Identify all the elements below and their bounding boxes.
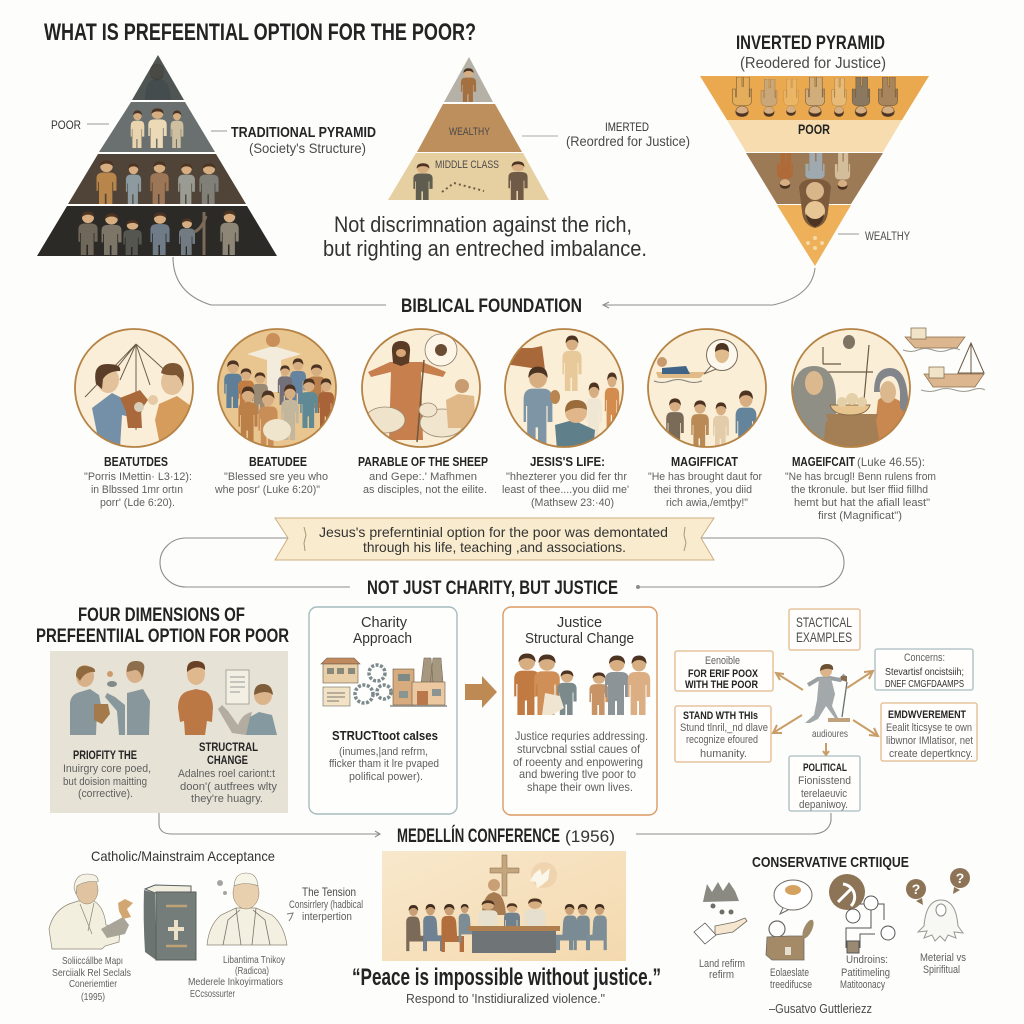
text: structural xyxy=(178,740,277,805)
text: jesus's life: "hhezterer you did fer thr xyxy=(506,471,627,483)
box: enable: Eenoible xyxy=(705,655,740,667)
box: stand with: recognize efoured xyxy=(686,734,758,746)
heading: medellin: MEDELLÍN CONFERENCE xyxy=(397,825,560,847)
label: traditional pyramid: (Society's Structure) xyxy=(249,140,366,156)
text: pope right caption xyxy=(188,954,286,1000)
text: parable: and Gepe:.' Mafhmen xyxy=(369,471,477,483)
box: concerns: Stevartisf oncistsiih; xyxy=(885,667,964,678)
label: inverted middle: IMERTED xyxy=(605,120,649,134)
box: concerns: DNEF CMGFDAAMPS xyxy=(885,679,964,690)
figures: priority xyxy=(70,661,150,735)
text: magnificat 1: MAGIFFICAT xyxy=(671,454,738,469)
text: structural: CHANGE xyxy=(207,753,248,767)
text: beatitudes 2: BEATUDEE xyxy=(249,454,307,469)
arrows: practical examples xyxy=(773,671,878,755)
text: priority: but doision maitting xyxy=(63,776,147,788)
text: undroins: Patitimeling xyxy=(841,967,890,979)
text: material vs spiritual xyxy=(920,952,966,976)
text: beatitudes 1: porr' (Lde 6:20). xyxy=(100,497,175,509)
icon: central figure xyxy=(805,664,850,723)
text: land reform xyxy=(699,958,745,981)
circle: magnificat 2 xyxy=(792,330,909,446)
panel: justice: Justice requries addressing. xyxy=(515,729,648,743)
text: priority xyxy=(63,748,151,800)
label: wealthy xyxy=(838,229,910,243)
panel: justice: and bwering tlve poor to xyxy=(519,767,636,781)
banner: through his life, teaching ,and associations. xyxy=(363,539,626,555)
text: material vs spiritual: Meterial vs xyxy=(920,952,966,964)
panel: justice xyxy=(503,607,657,815)
text: jesus's life: JESIS'S LIFE: xyxy=(530,454,605,469)
box: practical examples: EXAMPLES xyxy=(796,629,852,645)
connector: examples to medellin xyxy=(636,813,831,834)
text: magnificat 2: first (Magnificat") xyxy=(818,510,902,522)
text: beatitudes 1: BEATUTDES xyxy=(104,454,168,469)
text: pope right caption: (Radicoa) xyxy=(235,965,269,977)
box: political xyxy=(789,756,860,811)
text: ecclesiastical: treedifucse xyxy=(770,979,812,991)
heading: conservative critique: CONSERVATIVE CRTIIQUE xyxy=(752,854,909,871)
panel: four dimensions xyxy=(50,651,288,813)
text: pope left caption: Soliiccállbe Mapı xyxy=(62,955,123,967)
middle pyramid: MIDDLE CLASS xyxy=(435,159,499,171)
text: magnificat 1: "He has brought daut for xyxy=(648,471,762,483)
panel: charity xyxy=(309,607,457,814)
text: beatitudes 1: "Porris IMettin· L3·12): xyxy=(84,471,192,483)
icon: ghost with question marks: ? xyxy=(956,870,964,886)
box: political: POLITICAL xyxy=(803,762,847,774)
text: ecclesiastical xyxy=(770,967,812,991)
icon: pope right xyxy=(207,873,287,945)
text: tension: Consirrlery (hadbical xyxy=(289,899,363,911)
panel: charity: fficker tham it lre pvaped xyxy=(329,758,439,770)
box: empowerment: create depertkncy. xyxy=(889,748,973,760)
statement text: Not discrimnation against the rich, xyxy=(334,212,632,237)
middle pyramid: WEALTHY xyxy=(449,126,491,138)
text: magnificat 1: rich awia,/emtþy!" xyxy=(666,497,748,509)
box: practical examples: STACTICAL xyxy=(796,614,852,630)
title: WHAT IS PREFEENTIAL OPTION FOR THE POOR? xyxy=(44,19,476,46)
text: pope right caption: Libantima Tnikoy xyxy=(223,954,286,966)
icon: book xyxy=(144,885,196,960)
text: magnificat 1: thei thrones, you diid xyxy=(654,484,752,496)
text: land reform: refirm xyxy=(709,969,734,981)
text: undroins: Matitoonacy xyxy=(840,979,885,991)
heading: acceptance: Catholic/Mainstraim Acceptance xyxy=(91,848,275,864)
heading: four dimensions: PREFEENTIIAL OPTION FOR POOR xyxy=(36,626,289,647)
figures: structural change xyxy=(178,661,277,735)
icon: hammer and network xyxy=(829,874,895,953)
inverted pyramid heading xyxy=(736,33,886,72)
panel: justice: Justice xyxy=(557,614,602,631)
panel: charity: polifical power). xyxy=(349,771,423,783)
connector: inverted to biblical xyxy=(603,268,815,308)
text: magnificat 1 xyxy=(648,454,762,509)
icon: thought bubble and desk xyxy=(766,880,816,960)
text: magnificat 2: (Luke 46.55): xyxy=(857,455,925,469)
label: poor xyxy=(51,118,109,132)
box: empowerment: Eealit lticsyse te own xyxy=(886,722,972,734)
label: traditional pyramid: TRADITIONAL PYRAMID xyxy=(231,124,376,141)
text: structural: STRUCTRAL xyxy=(199,740,258,754)
box: concerns xyxy=(875,649,973,690)
text: undroins xyxy=(840,954,890,991)
text: beatitudes 1 xyxy=(84,454,192,509)
text: parable xyxy=(358,454,488,496)
inverted pyramid: POOR xyxy=(798,121,830,137)
box: stand with: humanity. xyxy=(700,748,747,760)
text: magnificat 2: hemt but hat the afiall least" xyxy=(794,497,930,509)
icon: ghost with question marks: ? xyxy=(912,881,920,897)
banner: Jesus's preferntinial option for the poor was demontated xyxy=(319,524,668,540)
text: pope left caption xyxy=(52,955,131,1003)
connector: dimensions to medellin xyxy=(159,813,380,837)
quote: “Peace is impossible without justice.” xyxy=(352,964,661,991)
text: structural: doon'( autfrees wlty xyxy=(180,781,277,793)
statement text xyxy=(323,212,647,261)
text: jesus's life: (Mathsew 23:·40) xyxy=(531,497,614,509)
text: magnificat 2 xyxy=(785,454,936,522)
circle: jesus's life xyxy=(505,329,623,450)
text: material vs spiritual: Spirifitual xyxy=(923,964,960,976)
text: pope left caption: Coneriemtier xyxy=(69,978,117,990)
icon: people group xyxy=(514,654,650,715)
text: pope right caption: ECcsossurter xyxy=(190,988,235,1000)
heading: four dimensions xyxy=(36,605,289,647)
traditional pyramid xyxy=(37,55,277,256)
panel: charity: STRUCTtoot caIses xyxy=(332,728,438,743)
heading: biblical foundation: BIBLICAL FOUNDATION xyxy=(401,296,582,317)
circle: beatitudes 1 xyxy=(75,329,195,450)
text: ecclesiastical: Eolaeslate xyxy=(770,967,809,979)
circle border 4 xyxy=(505,329,623,447)
panel: charity: (inumes,|and refrm, xyxy=(339,746,428,758)
text: jesus's life xyxy=(502,454,629,509)
box: stand with: STAND WTH THIs xyxy=(683,710,758,722)
connector: traditional to biblical xyxy=(173,257,386,305)
text: pope right caption: Mederele Inkoyirmatiors xyxy=(188,976,283,988)
text: land reform: Land refirm xyxy=(699,958,745,970)
box: practical examples xyxy=(789,609,860,650)
icon: hand with seeds xyxy=(694,882,747,944)
inverted pyramid heading: (Reodered for Justice) xyxy=(740,55,886,72)
box: political: Fionisstend xyxy=(798,775,851,787)
box: empowerment xyxy=(881,703,977,761)
middle pyramid xyxy=(388,57,549,200)
box: empowerment: libwnor IMlatisor, net xyxy=(886,735,973,747)
text: magnificat 2: MAGEIFCAIT xyxy=(792,454,855,469)
text: structural: they're huagry. xyxy=(191,793,263,805)
text: priority: (corrective). xyxy=(78,788,133,800)
heading: four dimensions: FOUR DIMENSIONS OF xyxy=(78,605,245,626)
box: empowerment: EMDWVEREMENT xyxy=(888,709,966,721)
panel: charity: Approach xyxy=(353,630,412,647)
panel: justice: of roeenty and enpowering xyxy=(513,755,643,769)
text: priority: Inuirgry core poed, xyxy=(63,763,151,775)
label: poor: POOR xyxy=(51,118,81,132)
circle border 3 xyxy=(362,329,480,447)
inverted pyramid xyxy=(700,76,929,266)
text: structural: Adalnes roel cariont:t xyxy=(178,768,275,780)
panel: charity: Charity xyxy=(361,614,407,631)
circle border 1 xyxy=(75,329,193,447)
box: enable: WITH THE POOR xyxy=(685,679,758,691)
illustration: medellin conference xyxy=(382,851,626,961)
circle border 6 xyxy=(792,329,910,447)
circle: parable of the sheep xyxy=(362,329,480,447)
heading: medellin: (1956) xyxy=(565,827,615,846)
label: wealthy: WEALTHY xyxy=(865,229,910,243)
label: inverted middle xyxy=(522,120,690,149)
icon: buildings and gears xyxy=(321,658,447,706)
text: tension: The Tension xyxy=(302,885,356,899)
circle border 2 xyxy=(218,329,336,447)
arrow: charity to justice xyxy=(465,676,497,708)
text: pope left caption: (1995) xyxy=(81,991,105,1003)
text: magnificat 2: the tkronule. but lser ffiid fillhd xyxy=(791,484,928,496)
text: beatitudes 2 xyxy=(214,454,328,496)
text: beatitudes 2: whe posr' (Luke 6:20)" xyxy=(214,484,320,496)
panel: justice: Structural Change xyxy=(525,630,634,647)
panel: justice: shape their own lives. xyxy=(527,780,633,794)
text: magnificat 2: "Ne has brcugl! Benn rulens from xyxy=(785,471,936,483)
circle: beatitudes 2 xyxy=(218,329,336,448)
connector loop right xyxy=(640,538,844,587)
text: parable: as disciples, not the eilite. xyxy=(363,484,487,496)
connector loop left xyxy=(160,538,350,587)
text: beatitudes 1: in Blbssed 1mr ortın xyxy=(91,484,183,496)
box: enable xyxy=(675,651,773,691)
text: pope left caption: Serciialk Rel Seclals xyxy=(52,967,131,979)
icon: ghost with question marks xyxy=(906,868,970,941)
box: stand with xyxy=(675,706,771,762)
text: central figure label: audioures xyxy=(812,728,848,740)
box: enable: FOR ERIF POOX xyxy=(688,668,759,680)
quote subtext: Respond to 'Instidiuralized violence." xyxy=(406,991,605,1006)
statement text: but righting an entreched imbalance. xyxy=(323,236,647,261)
box: concerns: Concerns: xyxy=(904,652,945,664)
label: inverted middle: (Reordred for Justice) xyxy=(566,133,690,149)
banner xyxy=(275,518,714,560)
attribution: –Gusatvo Guttleriezz xyxy=(769,1001,872,1016)
box: political: depaniwoy. xyxy=(799,799,848,811)
label: traditional pyramid xyxy=(211,124,376,156)
circle: magnificat 1 xyxy=(648,329,766,452)
connector dot xyxy=(636,585,640,589)
panel: justice: sturvcbnal sstial caues of xyxy=(517,742,641,756)
text: tension: interpertion xyxy=(302,911,352,923)
icon: boats xyxy=(903,328,985,392)
box: political: terelaeuvic xyxy=(801,788,847,800)
box: stand with: Stund tlnril,_nd dlave xyxy=(680,722,768,734)
heading: not just charity: NOT JUST CHARITY, BUT JUSTICE xyxy=(367,578,618,599)
circle border 5 xyxy=(648,329,766,447)
text: undroins: Undroins: xyxy=(846,954,888,966)
text: beatitudes 2: "Blessed sre yeu who xyxy=(224,471,328,483)
inverted pyramid heading: INVERTED PYRAMID xyxy=(736,33,885,54)
text: parable: PARABLE OF THE SHEEP xyxy=(358,454,488,469)
text: jesus's life: least of thee....you diid me' xyxy=(502,484,629,496)
icon: pope left xyxy=(49,874,133,949)
text: tension xyxy=(287,885,363,923)
text: priority: PRIOFITY THE xyxy=(73,748,137,762)
